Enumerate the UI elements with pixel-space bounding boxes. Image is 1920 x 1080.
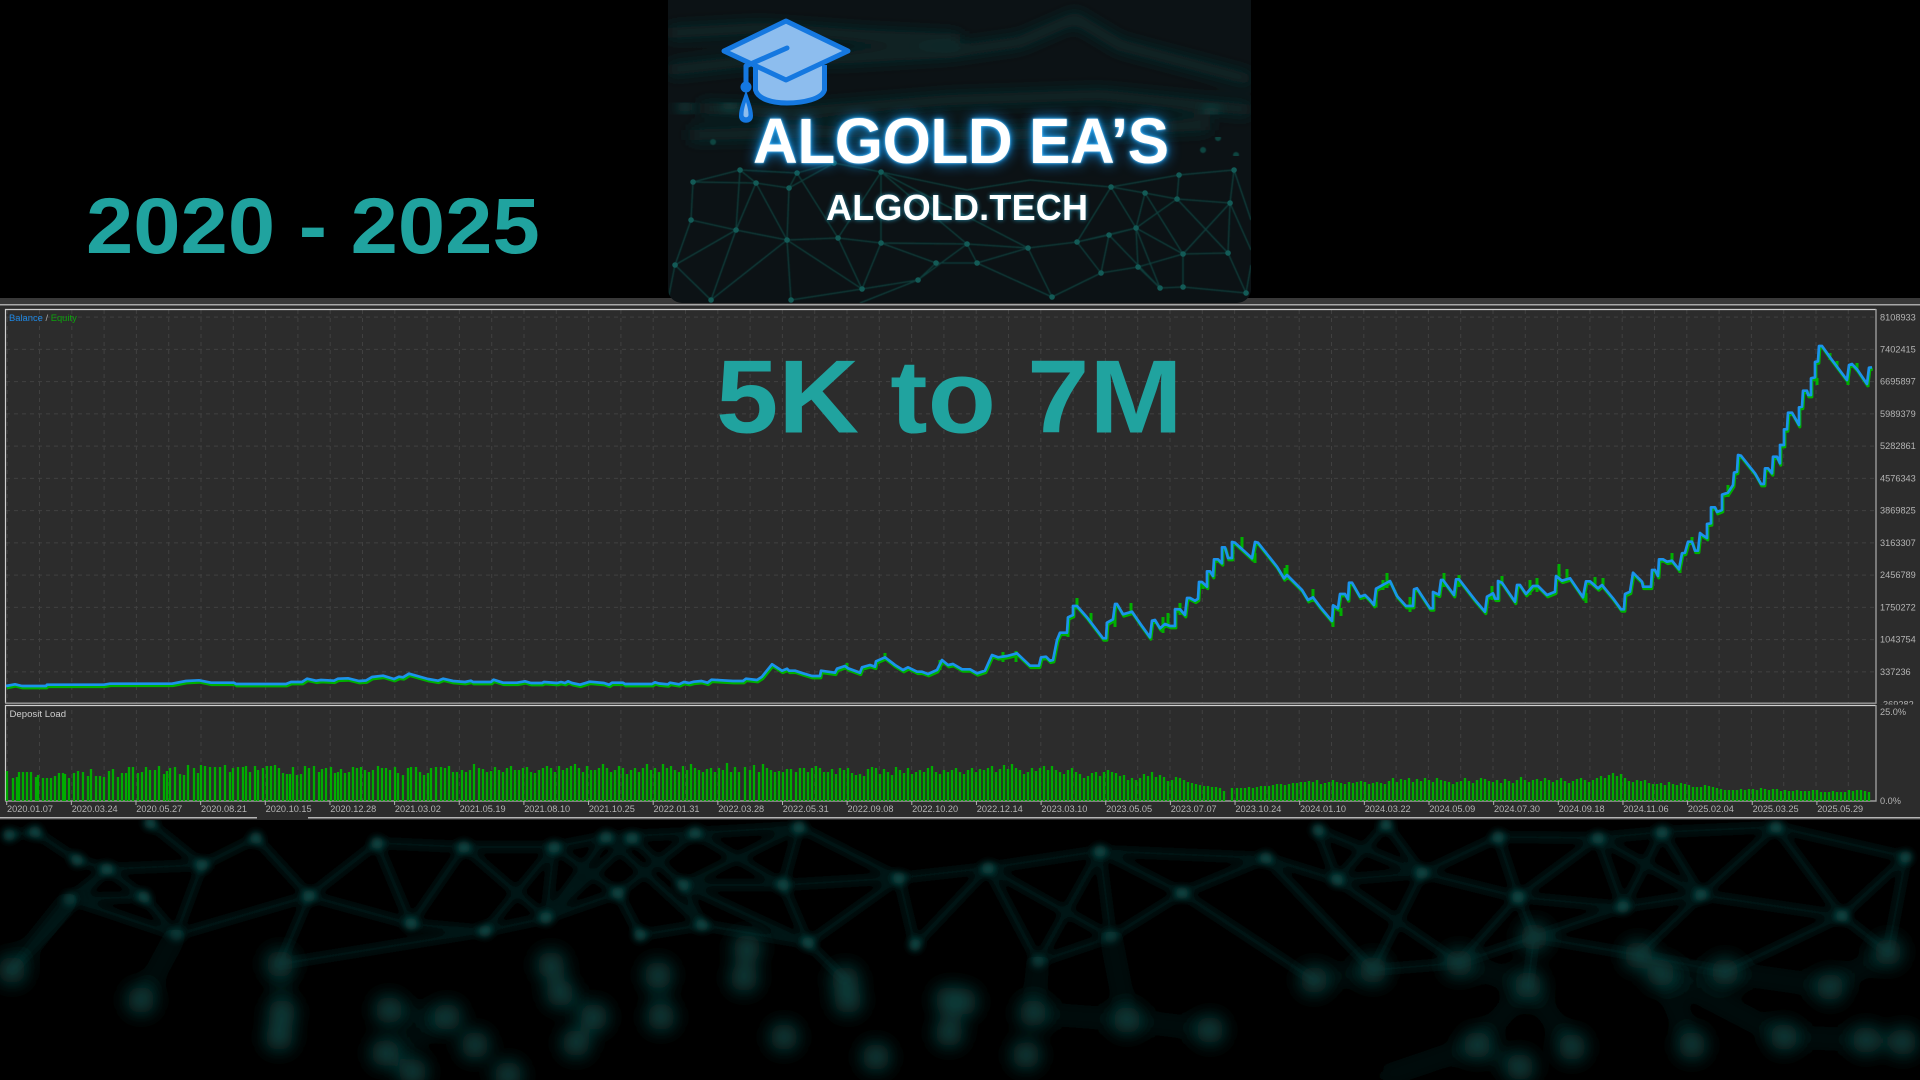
bar chart: deposit load xyxy=(7,763,1869,801)
y axis labels: 1750272 xyxy=(1880,602,1916,612)
deposit axis labels: 25.0% xyxy=(1880,707,1906,717)
x axis date labels: 2023.07.07 xyxy=(1171,804,1217,814)
x axis date labels: 2020.12.28 xyxy=(330,804,376,814)
x axis date labels: 2023.05.05 xyxy=(1106,804,1152,814)
x axis date labels: 2022.10.20 xyxy=(912,804,958,814)
x axis date labels: 2020.08.21 xyxy=(201,804,247,814)
x axis date labels: 2022.05.31 xyxy=(783,804,829,814)
pane border lower right xyxy=(5,309,1876,801)
deposit pane mask xyxy=(1877,704,1920,712)
pane borders xyxy=(6,310,1876,801)
x axis date labels: 2022.12.14 xyxy=(977,804,1023,814)
x axis date labels: 2020.03.24 xyxy=(72,804,118,814)
x axis date labels: 2020.05.27 xyxy=(136,804,182,814)
x axis date labels: 2023.03.10 xyxy=(1041,804,1087,814)
x axis date labels: 2022.03.28 xyxy=(718,804,764,814)
y axis labels: 5282861 xyxy=(1880,441,1916,451)
y axis labels xyxy=(1880,312,1916,710)
headline: 5K to 7M: 5K to 7M xyxy=(716,338,1183,455)
x axis date labels: 2024.03.22 xyxy=(1365,804,1411,814)
x axis date labels: 2021.08.10 xyxy=(524,804,570,814)
x axis date labels: 2024.11.06 xyxy=(1623,804,1669,814)
date range: 2020 - 2025: 2020 - 2025 xyxy=(86,182,540,271)
x axis date labels: 2024.05.09 xyxy=(1429,804,1475,814)
x axis date labels: 2025.02.04 xyxy=(1688,804,1734,814)
x axis date labels: 2024.09.18 xyxy=(1559,804,1605,814)
x axis date labels: 2025.05.29 xyxy=(1817,804,1863,814)
x axis date labels: 2024.01.10 xyxy=(1300,804,1346,814)
y axis labels: 3163307 xyxy=(1880,538,1916,548)
x axis date labels: 2020.01.07 xyxy=(7,804,53,814)
line chart: equity and balance curves xyxy=(6,346,1873,688)
y axis labels: 5989379 xyxy=(1880,409,1916,419)
x axis date labels: 2021.03.02 xyxy=(395,804,441,814)
y axis labels: 7402415 xyxy=(1880,344,1916,354)
x axis date labels: 2023.10.24 xyxy=(1235,804,1281,814)
x axis date labels: 2021.10.25 xyxy=(589,804,635,814)
y axis labels: 4576343 xyxy=(1880,474,1916,484)
logo title: ALGOLD EA'S: ALGOLD EA’S xyxy=(753,105,1169,177)
deposit axis labels: 0.0% xyxy=(1880,796,1901,806)
deposit load title: Deposit Load xyxy=(10,709,66,720)
x axis date labels: 2022.09.08 xyxy=(848,804,893,814)
network pattern xyxy=(668,12,1251,303)
deposit axis labels xyxy=(1880,707,1906,806)
legend: balance and equity: Balance / Equity xyxy=(9,312,77,323)
main pane grid xyxy=(6,310,1876,703)
x axis date labels: 2024.07.30 xyxy=(1494,804,1540,814)
chart window xyxy=(0,298,1920,820)
deposit pane grid xyxy=(6,706,1876,801)
icon: graduation cap xyxy=(722,18,850,123)
y axis labels: 1043754 xyxy=(1880,634,1916,644)
x axis date labels: 2022.01.31 xyxy=(654,804,699,814)
y axis labels: 8108933 xyxy=(1880,312,1916,322)
y axis labels: 2456789 xyxy=(1880,570,1916,580)
logo panel xyxy=(668,0,1251,303)
x axis ticks xyxy=(6,801,1876,805)
y axis labels: 3869825 xyxy=(1880,506,1916,516)
equity line xyxy=(7,348,1873,688)
balance line xyxy=(6,346,1872,686)
x axis date labels: 2021.05.19 xyxy=(460,804,506,814)
x axis date labels: 2025.03.25 xyxy=(1753,804,1799,814)
y axis labels: 337236 xyxy=(1880,667,1911,677)
x axis date labels: 2020.10.15 xyxy=(266,804,312,814)
y axis labels: 6695897 xyxy=(1880,376,1916,386)
logo url: ALGOLD.TECH: ALGOLD.TECH xyxy=(826,186,1088,228)
y axis labels: -369282 xyxy=(1880,700,1914,710)
equity spikes xyxy=(118,353,1868,687)
x axis date labels xyxy=(7,804,1863,814)
